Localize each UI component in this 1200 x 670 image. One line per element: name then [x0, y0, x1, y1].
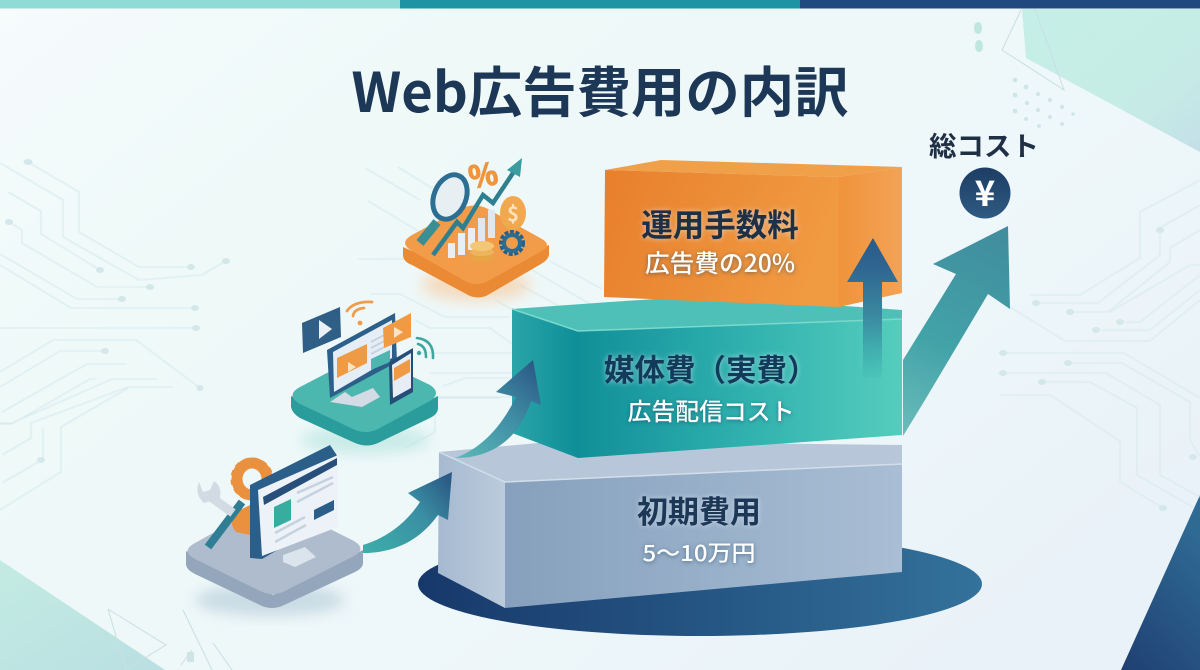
- screwdriver: [208, 502, 242, 547]
- dollar coin: [500, 196, 526, 230]
- arrow: up through blocks: [847, 238, 898, 378]
- circuit lines: decorative background: [0, 162, 1200, 510]
- icon: yen coin: [960, 166, 1010, 218]
- base ellipse shadow: [418, 532, 982, 636]
- dollar coin: $: [507, 198, 519, 227]
- trend arrow: [433, 167, 517, 255]
- sublabel: 広告費の20%: 広告費の20%: [645, 245, 795, 280]
- icon: yen coin: ¥: [975, 166, 996, 217]
- corner shape: bottom right navy: [1121, 495, 1200, 670]
- browser window: [250, 445, 338, 559]
- decorative dots and outline shapes: top right and bottom left: [108, 9, 1075, 670]
- corner shape: top right: [1022, 9, 1200, 152]
- block: 媒体費（実費）: [512, 296, 902, 458]
- sublabel: 5〜10万円: 5〜10万円: [642, 536, 756, 568]
- percent symbol: %: [465, 149, 501, 197]
- block: 初期費用: [438, 441, 902, 608]
- wrench: [197, 481, 233, 513]
- bar chart: [448, 210, 495, 258]
- heading: 媒体費（実費）: 媒体費（実費）: [604, 346, 818, 390]
- monitor stand: [283, 547, 316, 567]
- heading: 運用手数料: 運用手数料: [641, 200, 799, 246]
- icon: setup platform (grey): [186, 445, 363, 616]
- play card navy: [302, 307, 341, 353]
- title: Web広告費用の内訳: [352, 49, 848, 128]
- gear: [502, 233, 522, 253]
- arrow: curved, setup icon to media: [363, 472, 452, 553]
- play card orange: [383, 313, 411, 348]
- icon: media platform (teal): [291, 302, 438, 454]
- arrow: large rising to total cost: [903, 226, 1010, 436]
- sublabel: 広告配信コスト: 広告配信コスト: [628, 392, 794, 427]
- gear orange: [233, 460, 271, 498]
- top colour bars: [0, 0, 1200, 8]
- stand and monitor: [327, 313, 397, 407]
- corner shape: bottom left: [0, 560, 165, 670]
- icon: analytics platform (orange): [403, 149, 549, 301]
- wifi signals: [347, 302, 433, 358]
- heading: 初期費用: 初期費用: [637, 487, 761, 532]
- coin stack: [470, 241, 494, 262]
- circuit nodes: decorative background: [5, 159, 1197, 511]
- total cost label: 総コスト: [929, 125, 1039, 164]
- phone: [389, 348, 413, 405]
- arrow: curved, media to fee: [455, 360, 541, 458]
- block: 運用手数料: [604, 160, 902, 307]
- magnifier: [420, 170, 473, 243]
